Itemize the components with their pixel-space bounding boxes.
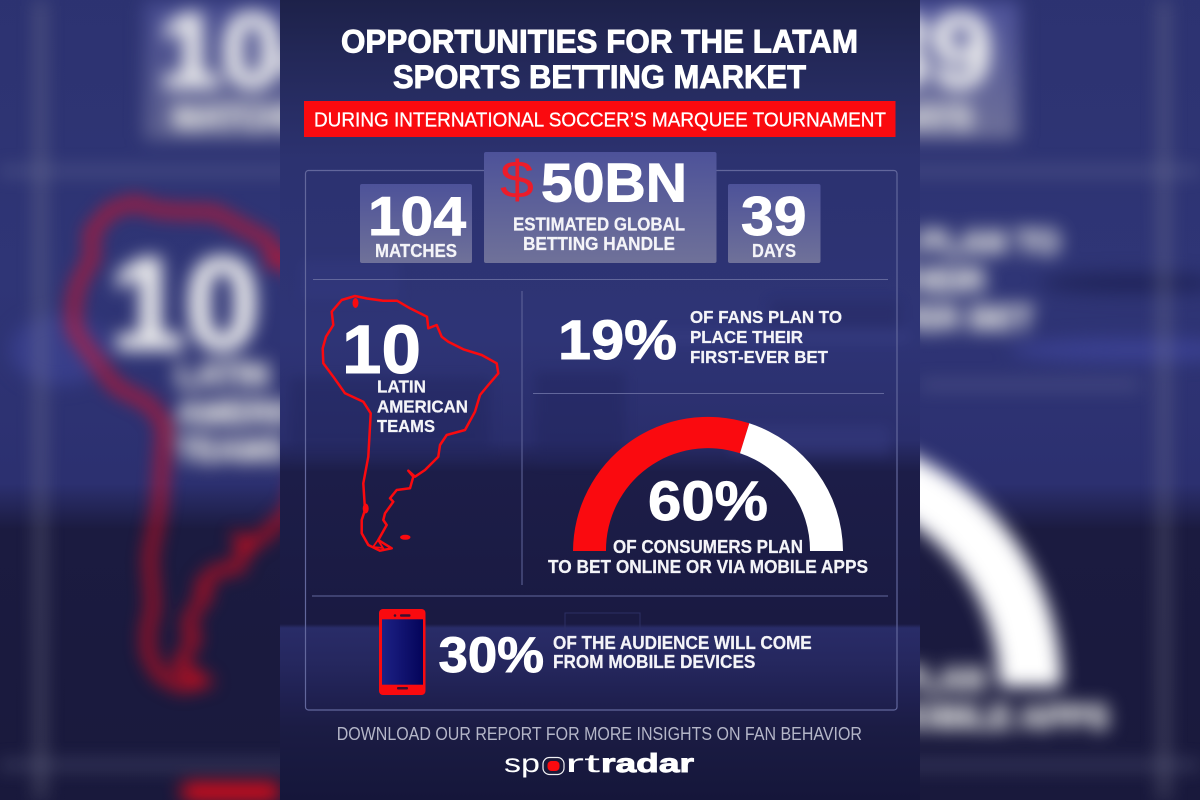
map: South America teams: AMERICAN: [377, 397, 468, 417]
central panel: [280, 0, 920, 800]
panel background: [280, 0, 920, 800]
stat: 19 percent first-ever bet: 19%: [558, 308, 677, 371]
stat: 30 percent mobile audience: 30%: [438, 627, 544, 683]
title: OPPORTUNITIES FOR THE LATAM: [341, 24, 858, 60]
blurred enlarged backdrop: OF CONSUMERS PLAN: [625, 661, 986, 699]
red subtitle banner: [304, 101, 896, 137]
icon: mobile phone: [379, 609, 426, 695]
stat: 19 percent first-ever bet: OF FANS PLAN TO: [690, 307, 842, 327]
stat: 19 percent first-ever bet: FIRST-EVER BET: [690, 347, 828, 367]
title: [341, 24, 858, 95]
stat box: 39 days: DAYS: [752, 241, 796, 261]
icon: South America outline: [323, 296, 498, 551]
map: South America teams: TEAMS: [377, 416, 435, 436]
gauge chart: 60 percent online or mobile: OF CONSUMERS PLAN: [613, 537, 803, 557]
blurred enlarged backdrop: OF FANS PLAN TO: [771, 225, 1060, 262]
blurred enlarged backdrop: 10: [110, 230, 260, 377]
logo: sportradar: [504, 748, 694, 778]
stat box: 39 days: [728, 184, 820, 263]
title: SPORTS BETTING MARKET: [393, 59, 806, 95]
map: South America teams: [323, 296, 498, 551]
content frame: [306, 170, 897, 710]
stat box: $50BN betting handle: 50BN: [541, 152, 687, 214]
stat box: 39 days: 39: [741, 185, 806, 247]
stat: 30 percent mobile audience: [438, 627, 812, 683]
footer call to action: DOWNLOAD OUR REPORT FOR MORE INSIGHTS ON FAN BEHAVIOR: [337, 724, 862, 744]
gauge chart: 60 percent online or mobile: TO BET ONLINE OR VIA MOBILE APPS: [548, 557, 868, 577]
stat box: 104 matches: MATCHES: [375, 241, 457, 261]
red subtitle banner: DURING INTERNATIONAL SOCCER’S MARQUEE TOURNAMENT: [314, 109, 886, 132]
blurred enlarged backdrop: PLACE THEIR: [771, 263, 986, 300]
gauge chart: 60 percent online or mobile: [548, 417, 868, 577]
stat: 19 percent first-ever bet: PLACE THEIR: [690, 327, 803, 347]
logo: sportradar: sp: [504, 748, 540, 778]
logo: sportradar: radar: [601, 748, 694, 778]
stat box: 104 matches: [360, 184, 472, 263]
blurred enlarged backdrop: DAYS: [889, 98, 972, 136]
stat: 30 percent mobile audience: FROM MOBILE DEVICES: [553, 652, 755, 672]
stat box: $50BN betting handle: BETTING HANDLE: [523, 234, 675, 254]
blurred enlarged backdrop: TO BET ONLINE OR VIA MOBILE APPS: [501, 699, 1109, 737]
gauge chart: 60 percent online or mobile: 60%: [648, 469, 768, 532]
logo: sportradar: rt: [565, 748, 602, 778]
stat box: $50BN betting handle: ESTIMATED GLOBAL: [513, 215, 685, 235]
stat box: $50BN betting handle: $: [500, 151, 534, 210]
stat: 19 percent first-ever bet: [558, 307, 842, 371]
map: South America teams: LATIN: [377, 377, 426, 397]
stat box: $50BN betting handle: [484, 151, 716, 263]
blurred enlarged backdrop: LATIN: [176, 357, 269, 394]
stat: 30 percent mobile audience: OF THE AUDIENCE WILL COME: [553, 633, 812, 653]
blurred enlarged backdrop: TEAMS: [176, 432, 287, 469]
blurred enlarged backdrop: AMERICAN: [176, 395, 349, 432]
blurred enlarged backdrop: MATCHES: [173, 98, 328, 136]
blurred enlarged backdrop: FIRST-EVER BET: [771, 301, 1033, 338]
stat box: 104 matches: 104: [368, 185, 466, 247]
map: South America teams: 10: [342, 311, 421, 388]
